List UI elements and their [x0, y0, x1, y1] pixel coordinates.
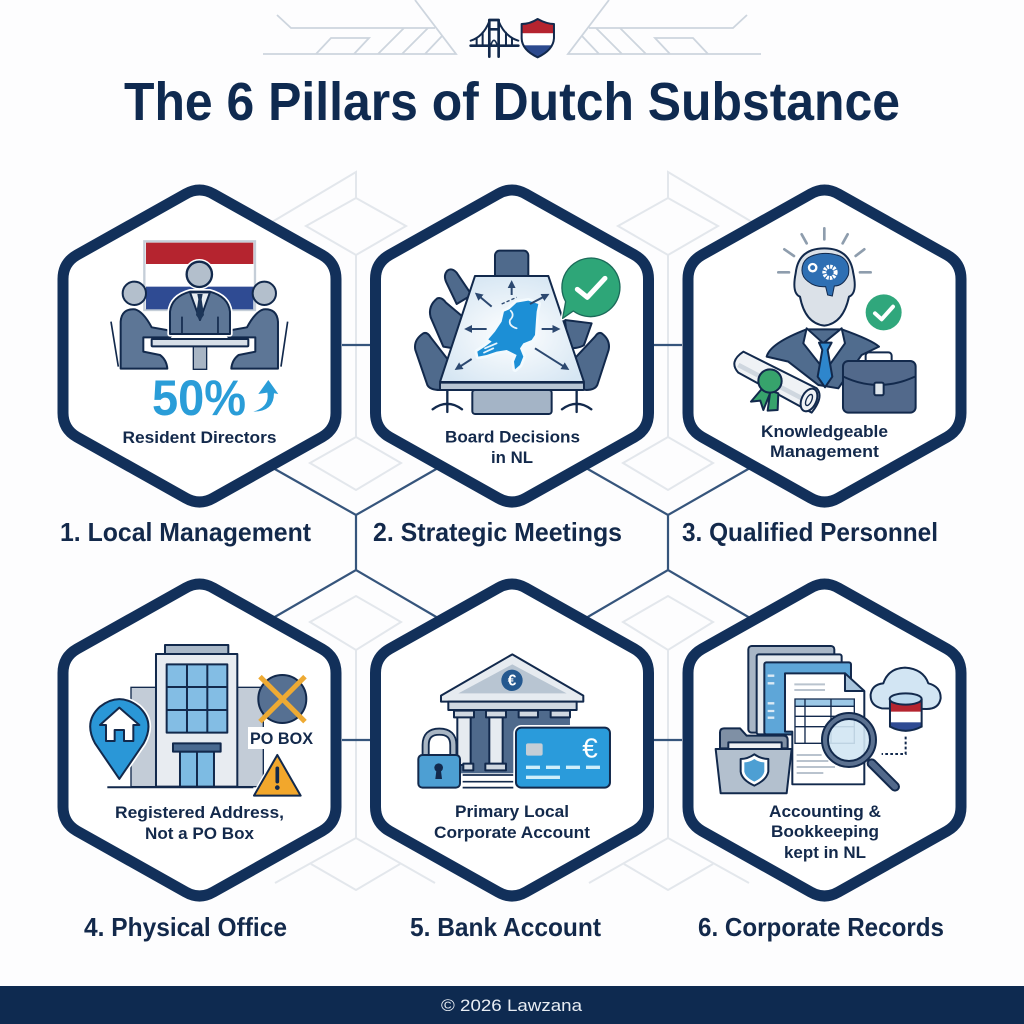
heading: 2. Strategic Meetings: 2. Strategic Meetings: [373, 517, 622, 547]
text: primary local corporate account: [434, 803, 591, 842]
icon: documents, folder, magnifier, cloud database: [716, 646, 941, 793]
icon: bank, padlock, euro card: €: [582, 733, 598, 764]
panel: pillar 2 strategic meetings: [376, 190, 648, 502]
text: board decisions in NL: [445, 428, 580, 467]
text: resident directors: Resident Directors: [122, 429, 276, 447]
text: accounting and bookkeeping: [769, 803, 881, 862]
text: accounting and bookkeeping: Accounting &: [769, 803, 881, 821]
icon: bank, padlock, euro card: [418, 654, 610, 788]
text: knowledgeable management: Knowledgeable: [761, 423, 888, 441]
hexagon frame 1: [63, 190, 336, 502]
text: registered address: Not a PO Box: [145, 825, 255, 843]
panel: pillar 1 local management: [63, 190, 336, 502]
panel: pillar 3 qualified personnel: [688, 190, 961, 502]
text: primary local corporate account: Corporate Account: [434, 824, 591, 842]
icon: boardroom table with Netherlands map: [415, 251, 620, 414]
footer bar: [0, 986, 1024, 1024]
heading: 4. Physical Office: 4. Physical Office: [84, 912, 287, 942]
hexagon frame 3: [688, 190, 961, 502]
icon: bank, padlock, euro card: €: [508, 673, 517, 690]
panel: pillar 5 bank account: [376, 584, 648, 896]
title: The 6 Pillars of Dutch Substance: [124, 72, 900, 132]
hexagon frame 2: [376, 190, 648, 502]
icon: Netherlands map: [477, 297, 538, 369]
label: PO BOX: PO BOX: [250, 729, 314, 748]
panel: pillar 4 physical office: [63, 584, 336, 896]
text: registered address: Registered Address,: [115, 804, 284, 822]
panel: pillar 6 corporate records: [688, 584, 961, 896]
text: accounting and bookkeeping: kept in NL: [784, 844, 866, 862]
hexagon frame 4: [63, 584, 336, 896]
icon: manager with brain, diploma and briefcase: [734, 228, 916, 414]
icon: directors at table with Dutch flag: [111, 241, 288, 412]
text: knowledgeable management: Management: [770, 443, 880, 461]
icon: bridge and Dutch shield: [471, 17, 557, 59]
icon: office building, pin, PO box warning: [90, 645, 306, 796]
text: knowledgeable management: [761, 423, 888, 461]
heading: 5. Bank Account: 5. Bank Account: [410, 912, 601, 942]
text: registered address: [115, 804, 284, 843]
text: accounting and bookkeeping: Bookkeeping: [771, 823, 879, 841]
text: primary local corporate account: Primary Local: [455, 803, 569, 821]
icon: bridge: [471, 20, 518, 57]
icon: shield with Dutch flag: [520, 17, 557, 59]
heading: 6. Corporate Records: 6. Corporate Records: [698, 912, 944, 942]
heading: 1. Local Management: 1. Local Management: [60, 517, 311, 547]
text: board decisions in NL: in NL: [491, 449, 533, 467]
footer bar: © 2026 Lawzana: [441, 996, 583, 1015]
hexagon frame 6: [688, 584, 961, 896]
hexagon frame 5: [376, 584, 648, 896]
text: board decisions in NL: Board Decisions: [445, 428, 580, 446]
heading: 3. Qualified Personnel: 3. Qualified Personnel: [682, 517, 938, 547]
header decoration: circuit lines: [263, 0, 761, 54]
stat: 50 percent: 50%: [152, 370, 246, 426]
